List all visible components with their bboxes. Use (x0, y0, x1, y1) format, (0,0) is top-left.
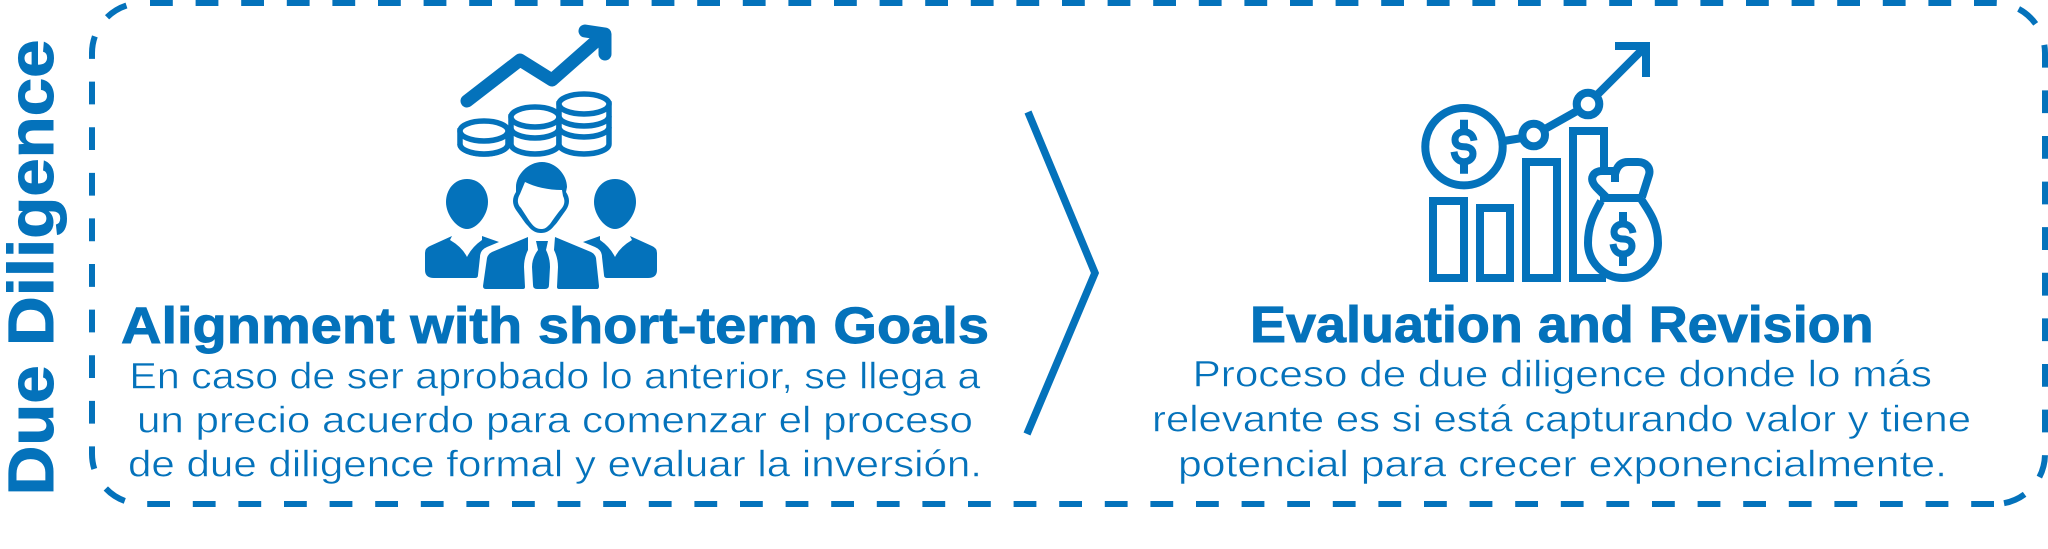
icon: right team member (583, 179, 657, 278)
icon: money bag (1588, 162, 1658, 278)
text block: alignment description (128, 355, 982, 485)
text block: evaluation description: potencial para crecer exponencialmente. (1178, 444, 1947, 485)
icon: rising arrow (467, 31, 605, 101)
text block: alignment description: un precio acuerdo para comenzar el proceso (137, 400, 973, 441)
panel: evaluation and revision (1152, 46, 1971, 485)
icon: central team member (483, 162, 599, 289)
heading: evaluation and revision: Evaluation and Revision (1250, 296, 1874, 353)
text block: evaluation description (1152, 354, 1971, 485)
text block: evaluation description: relevante es si está capturando valor y tiene (1152, 399, 1971, 440)
text block: evaluation description: Proceso de due diligence donde lo más (1193, 354, 1932, 395)
text block: alignment description: En caso de ser aprobado lo anterior, se llega a (129, 355, 981, 396)
icon: coin stacks (460, 94, 609, 154)
panel: alignment with short-term goals (121, 31, 989, 485)
icon: left team member (425, 179, 499, 278)
icon: growth chart with money bag (1425, 46, 1658, 278)
icon: dollar coin (1425, 108, 1503, 185)
heading: alignment with short-term goals: Alignment with short-term Goals (121, 297, 989, 354)
icon: trend line with arrow (1504, 46, 1646, 146)
icon: bar chart (1433, 131, 1606, 278)
icon: rising arrow, coins and team (425, 31, 657, 289)
arrow: chevron between steps (1027, 112, 1095, 434)
text block: alignment description: de due diligence formal y evaluar la inversión. (128, 444, 982, 485)
